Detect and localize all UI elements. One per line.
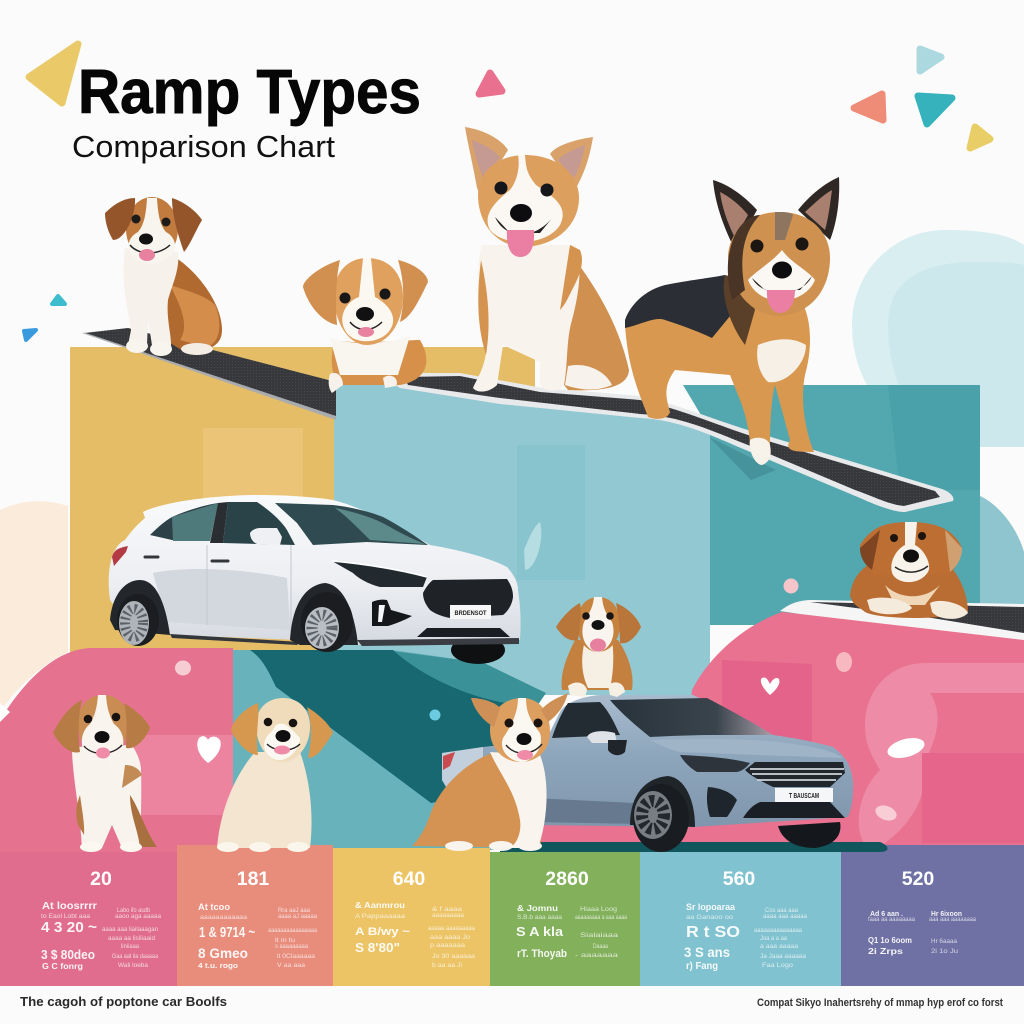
column: light blue: aaaaaaaaaaaaaaa [754, 928, 803, 934]
dog: orange sitting by car [412, 693, 568, 851]
car: white hatchback: BRDENSOT [454, 610, 487, 617]
column: purple: Hr 6ixoon [931, 911, 962, 918]
panel: pink right [530, 612, 1024, 850]
column: yellow: aaaaaaaaa [432, 913, 465, 919]
column: salmon: Rra aaJ aaa [278, 908, 311, 914]
dot: blue [430, 710, 440, 720]
dog: on top of car [556, 597, 641, 697]
column: salmon [177, 845, 333, 986]
column: green: aaaaaaaaa a aaa aaaa [575, 915, 628, 921]
column: salmon: At tcoo [198, 902, 231, 912]
column: yellow: A B/wy ~ [355, 926, 411, 938]
dog: lying on right ramp [850, 522, 968, 619]
column: yellow: A Pappaaaaaa [355, 914, 406, 920]
column: green [490, 852, 640, 986]
panel: light teal block [334, 385, 710, 695]
column: purple: 2i 1o Ju [931, 949, 958, 955]
dog: beagle on ramp [105, 197, 222, 356]
column: purple: 2i Zrps [868, 947, 904, 956]
icon: heart left [197, 736, 221, 763]
column: light blue: 560 [723, 868, 755, 890]
column: light blue: aa Ganaoo oo [686, 915, 734, 921]
column: green: 2860 [545, 868, 589, 890]
ramp: folding left [82, 328, 336, 420]
column: yellow: 640 [393, 868, 425, 890]
column: yellow: b aa aa Ji [432, 963, 462, 969]
column: yellow: p aaaaaaa [430, 943, 466, 949]
panel: lower teal waves [233, 650, 546, 850]
column: salmon: aaaa aJ aaaaa [278, 914, 318, 920]
column: light blue: R t SO [686, 924, 740, 941]
column: light blue: Cos aaa aaa [765, 908, 799, 914]
background blob: pale blue [852, 230, 1024, 447]
column: light blue [640, 852, 841, 986]
column: light blue: aaaa aaa aaaaa [763, 914, 808, 920]
dot: pale pink [784, 578, 798, 594]
column: pink: to Eaol Lobt aaa [41, 914, 91, 920]
column: light blue: Faa Logo [762, 963, 794, 969]
column: yellow: aaa aaaa Jo [430, 935, 471, 941]
column: purple: Hr 6aaaa [931, 939, 958, 945]
column: pink: Labo ifo asdb [117, 908, 151, 914]
panel: pink left [0, 648, 233, 852]
white mark left [0, 703, 10, 722]
column: pink: 4 3 20 ~ [41, 919, 97, 936]
column: salmon: aaaaaaaaaaaa [200, 915, 248, 921]
column: green: Daaaa [593, 944, 609, 950]
column: pink: aaaa aa lisliiaaid [108, 936, 155, 942]
car: blue-grey sedan [442, 695, 853, 852]
column: light blue: Sr lopoaraa [686, 902, 736, 912]
panel: yellow block [70, 347, 535, 657]
column: pink: Wali loeba [118, 963, 149, 969]
column: salmon: aaaaaaaaaaaaaaaa [268, 928, 318, 934]
column: purple: faaa aa aaaaaaaa [868, 917, 916, 923]
dog: cream sitting [217, 698, 333, 852]
column: yellow: S 8'80" [355, 940, 400, 955]
column: salmon: s aaaaaaaaa [275, 944, 309, 950]
decorative triangles [24, 44, 990, 340]
column: purple: aaa aaa aaaaaaaa [929, 917, 977, 923]
column: light blue: a aaa aaaaa [760, 944, 799, 950]
ramp: short right [780, 600, 1024, 640]
column: green: rT. Thoyab [517, 948, 567, 960]
dog: black and tan [625, 177, 839, 465]
column: light blue: Joa a a aa [760, 936, 788, 942]
dog: sitting on pink [53, 695, 157, 852]
column: purple [841, 845, 1024, 986]
column: light blue: 3 S ans [684, 944, 730, 960]
title: Ramp Types [78, 58, 421, 127]
car: white hatchback [109, 495, 521, 664]
car: blue-grey sedan: T BAUSCAM [789, 793, 819, 800]
footer note left: The cagoh of poptone car Boolfs [20, 994, 227, 1009]
column: light blue: Ja Jaaa aaaaaa [760, 954, 807, 960]
dog: fluffy puppy [303, 258, 428, 393]
column: purple: Ad 6 aan . [870, 911, 903, 918]
column: salmon: 4 t.u. rogo [198, 963, 238, 970]
background blob: peach [0, 501, 68, 712]
column: yellow: Jo 30 aaaaaa [432, 954, 476, 960]
column: yellow [333, 848, 490, 986]
column: yellow: aaaaa aaaaaaaaa [428, 926, 476, 932]
column: light blue: r) Fang [686, 961, 718, 972]
column: pink: aaoo aga aaaaa [115, 914, 162, 920]
column: pink: aaaa aaa liailaaagan [102, 927, 158, 933]
column: green: & Jomnu [517, 904, 558, 913]
column: salmon: it 0Claaaaaa [277, 954, 316, 960]
column: salmon: 8 Gmeo [198, 945, 248, 961]
column: yellow: & f aaaa [432, 907, 463, 913]
column: pink: liniiaaa [121, 944, 140, 950]
dog: large corgi [465, 127, 629, 392]
ground shadow [500, 842, 888, 852]
column: green: Sialaiaaa [580, 933, 619, 939]
column: salmon: lt in tu [275, 938, 295, 944]
column: green: S.B.b aaa aaaa [517, 915, 563, 921]
icon: heart right [761, 677, 779, 695]
comparison table [0, 845, 1024, 986]
column: salmon: 1 & 9714 ~ [199, 924, 255, 941]
column: yellow: & Aanmrou [355, 901, 405, 910]
subtitle: Comparison Chart [72, 129, 335, 164]
column: salmon: V aa aaa [277, 963, 306, 969]
column: purple: 520 [902, 868, 934, 890]
column: pink [0, 852, 177, 986]
column: pink: Gaa aat ila daaaaa [112, 954, 159, 960]
column: green: - aaaaaaa [575, 953, 619, 959]
column: pink: 20 [90, 868, 112, 890]
column: pink: At loosrrrr [42, 901, 97, 912]
background blob: right teal [980, 496, 1024, 620]
panel: teal block [683, 385, 980, 625]
column: green: Hiaaa Loog [580, 907, 617, 913]
column: green: S A kla [516, 924, 564, 939]
column: salmon: 181 [237, 868, 269, 890]
ramp: long centre [394, 373, 953, 512]
column: purple: Q1 1o 6oom [868, 936, 912, 945]
column: pink: G C fonrg [42, 962, 83, 971]
column: pink: 3 $ 80deo [41, 947, 95, 962]
